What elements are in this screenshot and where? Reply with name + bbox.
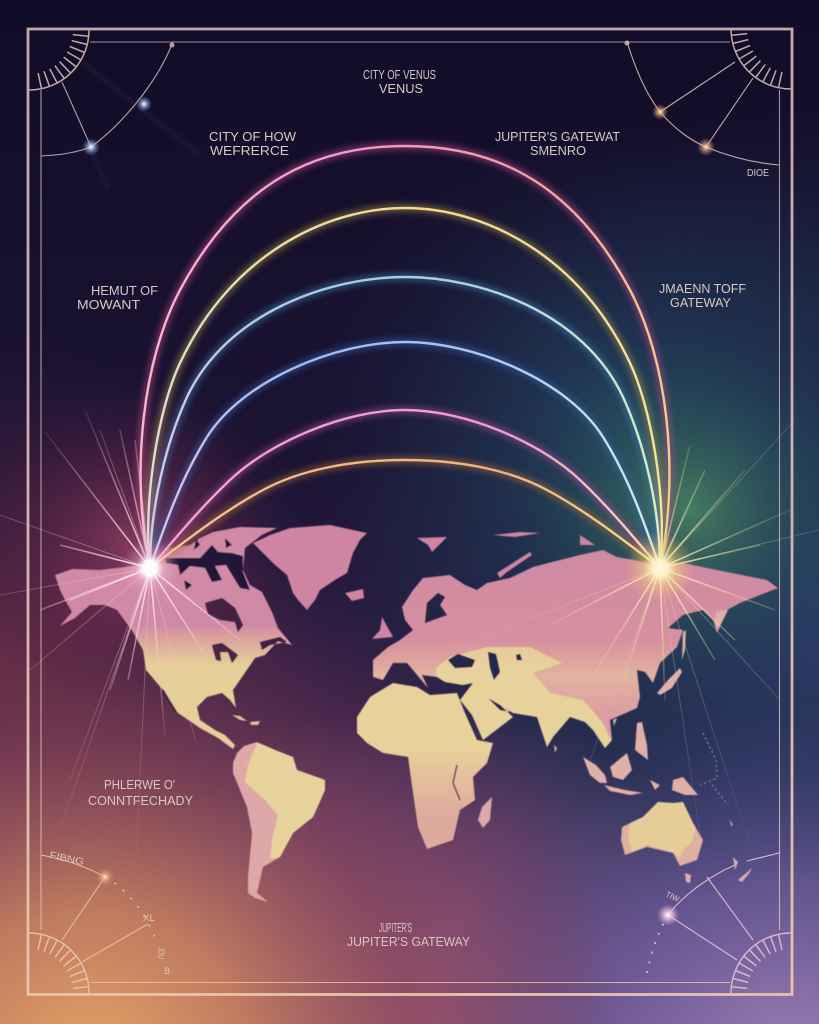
label: lower left bbox=[88, 778, 194, 808]
small label: bottom right arc mark: TIW bbox=[664, 890, 681, 904]
arc 3: sky blue bbox=[150, 277, 660, 568]
world map bbox=[55, 525, 778, 902]
Australia bbox=[621, 802, 703, 866]
label: top centre: VENUS bbox=[379, 82, 423, 96]
Madagascar bbox=[478, 797, 492, 828]
label: mid right: JMAENN TOFF bbox=[659, 282, 746, 296]
Africa bbox=[357, 683, 493, 849]
corner dial: bottom right bbox=[731, 933, 791, 993]
arc glow layer bbox=[141, 146, 669, 568]
label: upper right: JUPITER'S GATEWAT bbox=[495, 130, 620, 144]
label: upper right bbox=[495, 130, 620, 158]
Greenland bbox=[253, 525, 367, 610]
label: mid right: GATEWAY bbox=[670, 296, 732, 310]
label: bottom centre bbox=[347, 921, 471, 949]
constellation: top left bbox=[41, 42, 200, 190]
label: mid right bbox=[659, 282, 746, 310]
Iceland bbox=[345, 589, 364, 601]
corner dial: top right bbox=[731, 29, 791, 89]
constellation: top right bbox=[624, 40, 779, 165]
Arctic channels bbox=[165, 538, 250, 590]
Caribbean islands bbox=[232, 715, 260, 725]
label: top centre: CITY OF VENUS bbox=[363, 68, 436, 82]
small label: bottom left arc marks: XL bbox=[143, 913, 155, 923]
label: top centre bbox=[363, 68, 436, 96]
label: upper left: CITY OF HOW bbox=[209, 130, 296, 144]
label: lower left: PHLERWE O' bbox=[104, 778, 175, 792]
light rays: left star bbox=[0, 410, 240, 880]
arc 4: periwinkle bbox=[150, 342, 660, 568]
constellation: bottom left bbox=[41, 855, 158, 962]
Baja channel bbox=[163, 690, 176, 712]
New Zealand and Pacific dots bbox=[730, 820, 752, 882]
label: mid left: MOWANT bbox=[77, 298, 140, 312]
arc 6: orange bbox=[150, 460, 660, 568]
small label: bottom left arc marks bbox=[143, 913, 170, 976]
star burst: left bbox=[120, 538, 180, 598]
islands: Asia Pacific bbox=[554, 610, 728, 883]
light arcs bbox=[141, 146, 669, 568]
North America bbox=[55, 527, 292, 749]
light rays: right star bbox=[450, 420, 819, 860]
small label: bottom left arc marks: B bbox=[164, 966, 170, 976]
small label: bottom left curve: FIBNG bbox=[48, 850, 85, 868]
islands: northern seas bbox=[372, 532, 595, 639]
label: upper left bbox=[209, 130, 296, 158]
small label: bottom left arc marks: JOU bbox=[156, 947, 166, 959]
star burst: right bbox=[624, 532, 696, 604]
label: mid left bbox=[77, 284, 158, 312]
arc 2: yellow bbox=[148, 208, 662, 568]
label: bottom centre: JUPITER'S GATEWAY bbox=[347, 935, 471, 949]
label: upper left: WEFRERCE bbox=[210, 144, 289, 158]
corner dial: bottom left bbox=[29, 933, 89, 993]
South America bbox=[233, 742, 325, 902]
label: mid left: HEMUT OF bbox=[91, 284, 158, 298]
small label: top right corner: DIOE bbox=[747, 168, 769, 179]
label: upper right: SMENRO bbox=[530, 144, 586, 158]
corner dial: top left bbox=[29, 30, 89, 90]
arc 5: magenta bbox=[150, 410, 660, 568]
label: bottom centre: JUPITER'S bbox=[379, 921, 412, 935]
Eurasia bbox=[373, 550, 778, 748]
constellation: bottom right bbox=[646, 853, 779, 978]
arc 1: pink bbox=[141, 146, 669, 568]
label: lower left: CONNTFECHADY bbox=[88, 794, 194, 808]
